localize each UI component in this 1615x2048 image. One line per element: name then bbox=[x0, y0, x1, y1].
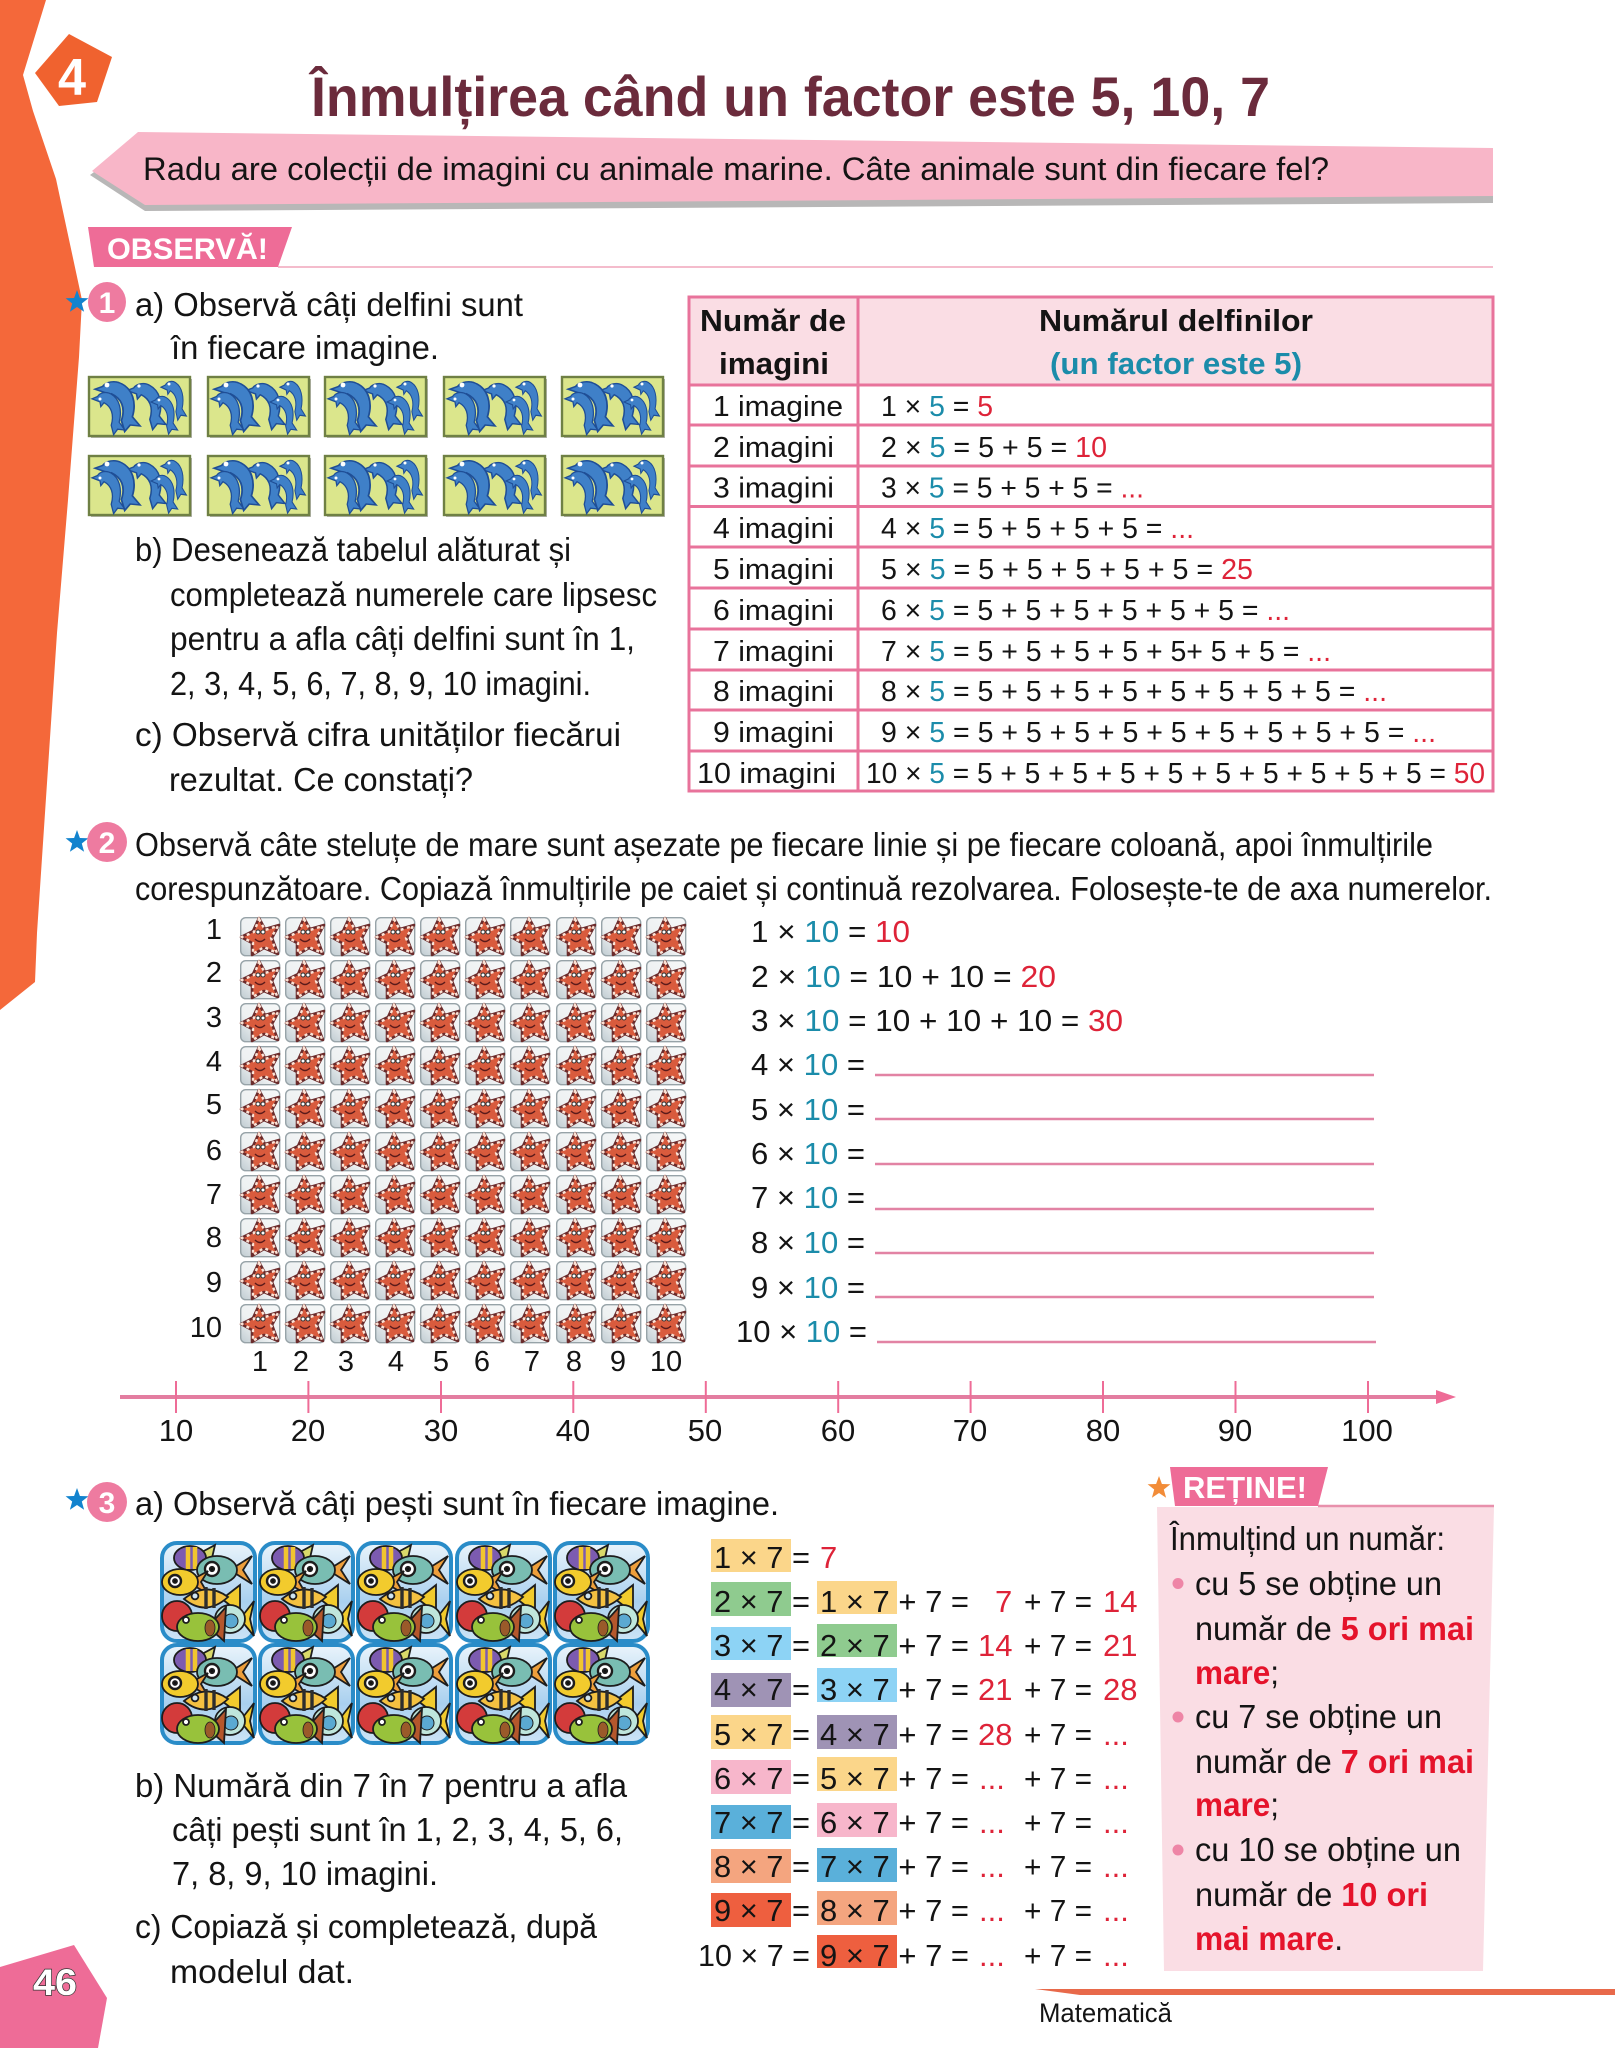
grid column labels: 1 bbox=[252, 1346, 268, 1378]
page number tab bbox=[0, 1945, 107, 2048]
table: number of dolphins: 10 imagini bbox=[697, 758, 836, 790]
number line: 30 bbox=[424, 1413, 458, 1448]
panel: rețin: număr de 5 ori mai bbox=[1195, 1610, 1474, 1647]
multiplication by 7 equations: + 7 = bbox=[1024, 1761, 1092, 1796]
grid row labels: 1 bbox=[206, 914, 222, 946]
multiplication by 7 equations: ... bbox=[1103, 1717, 1129, 1752]
multiplication by 7 equations: + 7 = bbox=[1024, 1584, 1092, 1619]
multiplication by 7 equations: 5 × 7 + 7 = bbox=[820, 1761, 969, 1796]
panel: rețin: mai mare. bbox=[1195, 1920, 1343, 1957]
exercise 1b and 1c text: completează numerele care lipsesc bbox=[170, 576, 657, 613]
grid column labels: 3 bbox=[338, 1346, 354, 1378]
multiplication by 7 equations: 7 × 7 + 7 = bbox=[820, 1849, 969, 1884]
multiplication by 7 equations bbox=[698, 1540, 1137, 1973]
multiplication by 7 equations: 2 × 7 = bbox=[714, 1584, 810, 1619]
multiplication by 7 equations: ... bbox=[1103, 1893, 1129, 1928]
chapter number badge: 4 bbox=[58, 49, 86, 107]
panel: rețin: cu 10 se obține un bbox=[1195, 1831, 1461, 1868]
exercise 2 text: Observă câte steluțe de mare sunt așezate pe fiecare linie și pe fiecare coloană, apoi înmulțirile bbox=[135, 826, 1433, 863]
table: number of dolphins: imagini bbox=[719, 346, 829, 381]
exercise 3b and 3c text: b) Numără din 7 în 7 pentru a afla bbox=[135, 1767, 628, 1804]
exercise 1b and 1c text: 2, 3, 4, 5, 6, 7, 8, 9, 10 imagini. bbox=[170, 665, 591, 702]
panel: rețin: număr de 10 ori bbox=[1195, 1876, 1428, 1913]
multiplication by 7 equations: 1 × 7 = bbox=[714, 1540, 810, 1575]
multiplication by 7 equations: 4 × 7 = bbox=[714, 1672, 810, 1707]
multiplication by 10 list bbox=[736, 914, 1376, 1349]
table: number of dolphins bbox=[689, 297, 1493, 791]
table: number of dolphins: 7 × 5 = 5 + 5 + 5 + 5 + 5+ 5 + 5 = ... bbox=[881, 636, 1331, 668]
dolphin image cards bbox=[89, 377, 665, 517]
multiplication by 7 colored chips bbox=[711, 1539, 897, 1968]
multiplication by 7 equations: + 7 = bbox=[1024, 1893, 1092, 1928]
table: number of dolphins: 4 × 5 = 5 + 5 + 5 + 5 = ... bbox=[881, 513, 1194, 545]
multiplication by 7 equations: ... bbox=[979, 1893, 1005, 1928]
number line: 40 bbox=[556, 1413, 590, 1448]
grid row labels: 8 bbox=[206, 1222, 222, 1254]
panel: rețin: mare; bbox=[1195, 1654, 1279, 1691]
exercise 3b and 3c text: 7, 8, 9, 10 imagini. bbox=[172, 1855, 438, 1892]
number line: 80 bbox=[1086, 1413, 1120, 1448]
multiplication by 10 list: 8 × 10 = bbox=[751, 1225, 865, 1260]
table: number of dolphins: (un factor este 5) bbox=[1050, 346, 1302, 381]
grid row labels: 6 bbox=[206, 1135, 222, 1167]
table: number of dolphins: 9 imagini bbox=[713, 717, 834, 749]
panel: rețin: Înmulțind un număr: bbox=[1169, 1520, 1445, 1557]
grid column labels: 10 bbox=[650, 1346, 682, 1378]
multiplication by 7 equations: 3 × 7 + 7 = bbox=[820, 1672, 969, 1707]
table: number of dolphins: 4 imagini bbox=[713, 513, 834, 545]
number line: 90 bbox=[1218, 1413, 1252, 1448]
multiplication by 7 equations: + 7 = bbox=[1024, 1849, 1092, 1884]
multiplication by 7 equations: 8 × 7 + 7 = bbox=[820, 1893, 969, 1928]
multiplication by 7 equations: + 7 = bbox=[1024, 1805, 1092, 1840]
table: number of dolphins: 8 imagini bbox=[713, 676, 834, 708]
multiplication by 7 equations: ... bbox=[979, 1849, 1005, 1884]
multiplication by 10 list: 6 × 10 = bbox=[751, 1136, 865, 1171]
exercise 1a text bbox=[135, 286, 523, 366]
table: number of dolphins: 10 × 5 = 5 + 5 + 5 + 5 + 5 + 5 + 5 + 5 + 5 + 5 = 50 bbox=[866, 758, 1485, 790]
table: number of dolphins: 5 imagini bbox=[713, 554, 834, 586]
banner: problem statement: Radu are colecții de imagini cu animale marine. Câte animale sunt din fiecare fel? bbox=[143, 151, 1329, 187]
multiplication by 7 equations: 14 bbox=[978, 1628, 1012, 1663]
multiplication by 7 equations: 14 bbox=[1103, 1584, 1137, 1619]
exercise 1b and 1c text: rezultat. Ce constați? bbox=[169, 761, 473, 798]
multiplication by 7 equations: 21 bbox=[1103, 1628, 1137, 1663]
table: number of dolphins: 1 × 5 = 5 bbox=[881, 391, 993, 423]
multiplication by 7 equations: ... bbox=[1103, 1938, 1129, 1973]
multiplication by 7 equations: + 7 = bbox=[1024, 1672, 1092, 1707]
grid row labels: 5 bbox=[206, 1089, 222, 1121]
multiplication by 7 equations: 1 × 7 + 7 = bbox=[820, 1584, 969, 1619]
multiplication by 7 equations: ... bbox=[1103, 1761, 1129, 1796]
multiplication by 7 equations: 10 × 7 = bbox=[698, 1938, 810, 1973]
exercise 1b and 1c text: b) Desenează tabelul alăturat și bbox=[135, 531, 571, 568]
table: number of dolphins: 6 imagini bbox=[713, 595, 834, 627]
multiplication by 7 equations: + 7 = bbox=[1024, 1628, 1092, 1663]
grid column labels bbox=[252, 1346, 682, 1378]
table: number of dolphins: 2 imagini bbox=[713, 432, 834, 464]
table: number of dolphins: Numărul delfinilor bbox=[1039, 303, 1313, 338]
grid row labels: 10 bbox=[190, 1312, 222, 1344]
multiplication by 7 equations: 6 × 7 + 7 = bbox=[820, 1805, 969, 1840]
multiplication by 7 equations: 2 × 7 + 7 = bbox=[820, 1628, 969, 1663]
multiplication by 7 equations: 7 × 7 = bbox=[714, 1805, 810, 1840]
number line: 10 bbox=[159, 1413, 193, 1448]
multiplication by 7 equations: + 7 = bbox=[1024, 1717, 1092, 1752]
title: Înmulțirea când un factor este 5, 10, 7 bbox=[308, 65, 1270, 129]
exercise 1 marker bbox=[66, 282, 126, 322]
table: number of dolphins: 5 × 5 = 5 + 5 + 5 + 5 + 5 = 25 bbox=[881, 554, 1253, 586]
number line: 50 bbox=[688, 1413, 722, 1448]
exercise 3b and 3c text: c) Copiază și completează, după bbox=[135, 1908, 598, 1945]
grid row labels: 7 bbox=[206, 1179, 222, 1211]
grid row labels: 4 bbox=[206, 1046, 222, 1078]
exercise 3b and 3c text bbox=[135, 1767, 628, 1990]
exercise 3 marker bbox=[66, 1482, 127, 1522]
exercise 2 marker: 2 bbox=[99, 827, 115, 860]
multiplication by 7 equations: 8 × 7 = bbox=[714, 1849, 810, 1884]
grid column labels: 7 bbox=[524, 1346, 540, 1378]
multiplication by 10 list: 2 × 10 = 10 + 10 = 20 bbox=[751, 959, 1056, 994]
exercise 2 text bbox=[135, 826, 1492, 907]
multiplication by 7 equations: ... bbox=[979, 1805, 1005, 1840]
exercise 1a text: a) Observă câți delfini sunt bbox=[135, 286, 523, 323]
panel: rețin: mare; bbox=[1195, 1786, 1279, 1823]
multiplication by 7 equations: 4 × 7 + 7 = bbox=[820, 1717, 969, 1752]
grid column labels: 5 bbox=[433, 1346, 449, 1378]
number line: 100 bbox=[1341, 1413, 1393, 1448]
multiplication by 7 equations: 6 × 7 = bbox=[714, 1761, 810, 1796]
exercise 3a text: a) Observă câți pești sunt în fiecare imagine. bbox=[135, 1485, 779, 1522]
multiplication by 7 equations: 28 bbox=[1103, 1672, 1137, 1707]
number line: 20 bbox=[291, 1413, 325, 1448]
exercise 1b and 1c text: c) Observă cifra unităților fiecărui bbox=[135, 716, 621, 753]
multiplication by 7 equations: ... bbox=[1103, 1849, 1129, 1884]
multiplication by 10 list: 3 × 10 = 10 + 10 + 10 = 30 bbox=[751, 1003, 1123, 1038]
multiplication by 7 equations: 5 × 7 = bbox=[714, 1717, 810, 1752]
footer rule and subject: Matematică bbox=[1039, 1998, 1173, 2028]
grid column labels: 9 bbox=[610, 1346, 626, 1378]
number line: 70 bbox=[953, 1413, 987, 1448]
exercise 1b and 1c text: pentru a afla câți delfini sunt în 1, bbox=[170, 620, 635, 657]
multiplication by 7 equations: ... bbox=[979, 1938, 1005, 1973]
orange side band bbox=[0, 0, 82, 1010]
grid row labels: 9 bbox=[206, 1267, 222, 1299]
grid column labels: 2 bbox=[293, 1346, 309, 1378]
multiplication by 10 list: 9 × 10 = bbox=[751, 1270, 865, 1305]
panel: rețin: număr de 7 ori mai bbox=[1195, 1743, 1474, 1780]
multiplication by 7 equations: 28 bbox=[978, 1717, 1012, 1752]
multiplication by 7 equations: 21 bbox=[978, 1672, 1012, 1707]
exercise 3 marker: 3 bbox=[99, 1487, 115, 1520]
multiplication by 7 equations: + 7 = bbox=[1024, 1938, 1092, 1973]
banner: problem statement bbox=[90, 132, 1493, 211]
page number tab: 46 bbox=[33, 1962, 77, 2003]
panel: rețin: REȚINE! bbox=[1183, 1470, 1307, 1505]
grid row labels: 3 bbox=[206, 1002, 222, 1034]
grid column labels: 4 bbox=[388, 1346, 404, 1378]
panel: rețin: cu 5 se obține un bbox=[1195, 1565, 1442, 1602]
multiplication by 10 list: 5 × 10 = bbox=[751, 1092, 865, 1127]
multiplication by 7 equations: 9 × 7 + 7 = bbox=[820, 1938, 969, 1973]
exercise 1 marker: 1 bbox=[99, 287, 115, 320]
table: number of dolphins: 9 × 5 = 5 + 5 + 5 + 5 + 5 + 5 + 5 + 5 + 5 = ... bbox=[881, 717, 1436, 749]
multiplication by 7 equations: 3 × 7 = bbox=[714, 1628, 810, 1663]
section tab: observă: OBSERVĂ! bbox=[107, 232, 268, 266]
table: number of dolphins: 8 × 5 = 5 + 5 + 5 + 5 + 5 + 5 + 5 + 5 = ... bbox=[881, 676, 1387, 708]
table: number of dolphins: 2 × 5 = 5 + 5 = 10 bbox=[881, 432, 1107, 464]
table: number of dolphins: 6 × 5 = 5 + 5 + 5 + 5 + 5 + 5 = ... bbox=[881, 595, 1290, 627]
number line bbox=[120, 1381, 1456, 1448]
section tab: observă bbox=[88, 227, 1493, 267]
grid column labels: 8 bbox=[566, 1346, 582, 1378]
starfish grid bbox=[241, 918, 686, 1343]
footer rule and subject bbox=[1035, 1989, 1615, 2028]
exercise 3b and 3c text: modelul dat. bbox=[170, 1953, 354, 1990]
multiplication by 10 list: 7 × 10 = bbox=[751, 1180, 865, 1215]
grid column labels: 6 bbox=[474, 1346, 490, 1378]
grid row labels bbox=[190, 914, 222, 1344]
multiplication by 7 equations: 9 × 7 = bbox=[714, 1893, 810, 1928]
exercise 2 text: corespunzătoare. Copiază înmulțirile pe caiet și continuă rezolvarea. Folosește-te de axa numerelor. bbox=[135, 870, 1492, 907]
table: number of dolphins: Număr de bbox=[700, 303, 846, 338]
table: number of dolphins: 3 × 5 = 5 + 5 + 5 = ... bbox=[881, 472, 1144, 504]
chapter number badge bbox=[35, 34, 112, 107]
multiplication by 10 list: 1 × 10 = 10 bbox=[751, 914, 910, 949]
number line: 60 bbox=[821, 1413, 855, 1448]
exercise 1b and 1c text bbox=[135, 531, 657, 798]
exercise 3b and 3c text: câți pești sunt în 1, 2, 3, 4, 5, 6, bbox=[172, 1811, 623, 1848]
multiplication by 7 equations: 7 bbox=[820, 1540, 837, 1575]
table: number of dolphins: 3 imagini bbox=[713, 472, 834, 504]
multiplication by 10 list: 10 × 10 = bbox=[736, 1314, 867, 1349]
table: number of dolphins: 7 imagini bbox=[713, 636, 834, 668]
multiplication by 7 equations: ... bbox=[1103, 1805, 1129, 1840]
multiplication by 7 equations: 7 bbox=[995, 1584, 1012, 1619]
panel: rețin: cu 7 se obține un bbox=[1195, 1698, 1442, 1735]
grid row labels: 2 bbox=[206, 957, 222, 989]
multiplication by 7 equations: ... bbox=[979, 1761, 1005, 1796]
multiplication by 10 list: 4 × 10 = bbox=[751, 1047, 865, 1082]
panel: rețin bbox=[1148, 1467, 1494, 1971]
fish image cards bbox=[162, 1543, 648, 1743]
exercise 1a text: în fiecare imagine. bbox=[170, 329, 439, 366]
exercise 2 marker bbox=[66, 822, 127, 862]
table: number of dolphins: 1 imagine bbox=[713, 391, 843, 423]
